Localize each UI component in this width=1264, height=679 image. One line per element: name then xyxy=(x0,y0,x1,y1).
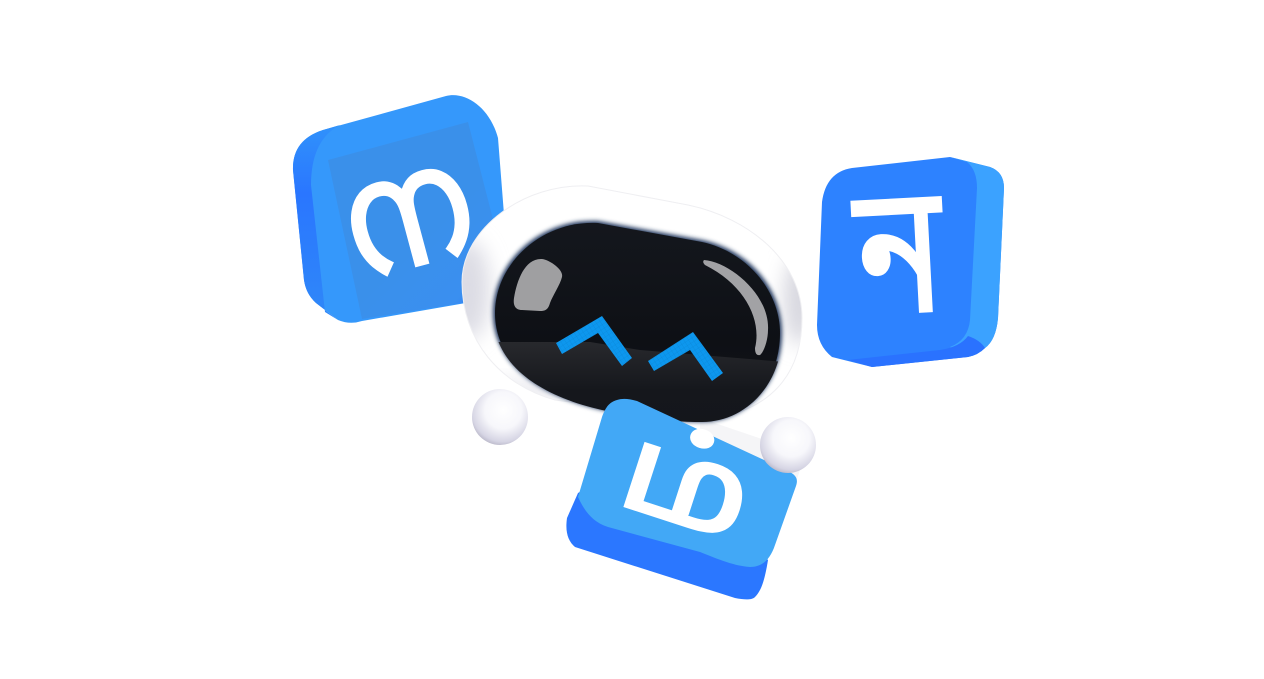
eye: left xyxy=(556,316,632,366)
visor reflection xyxy=(498,342,778,422)
letter: Tamil ma: ம் xyxy=(606,400,770,566)
tile: right letter xyxy=(817,148,1004,367)
robot head xyxy=(462,186,802,479)
tile: left letter xyxy=(293,95,506,323)
visor glow xyxy=(493,221,782,422)
highlight: right xyxy=(703,260,768,355)
letter: Malayalam na: ന xyxy=(325,111,492,313)
eye: right xyxy=(648,332,723,381)
highlight: left xyxy=(514,259,562,311)
illustration: robot head with letter tiles xyxy=(292,95,1004,600)
sphere: right xyxy=(760,417,816,473)
letter: Bengali na: ন xyxy=(849,148,949,353)
tile: bottom letter xyxy=(566,399,797,599)
visor xyxy=(495,223,780,420)
shell outline xyxy=(462,186,802,420)
shell extension xyxy=(700,418,800,500)
head shell xyxy=(462,212,802,398)
sphere: left xyxy=(472,389,528,445)
